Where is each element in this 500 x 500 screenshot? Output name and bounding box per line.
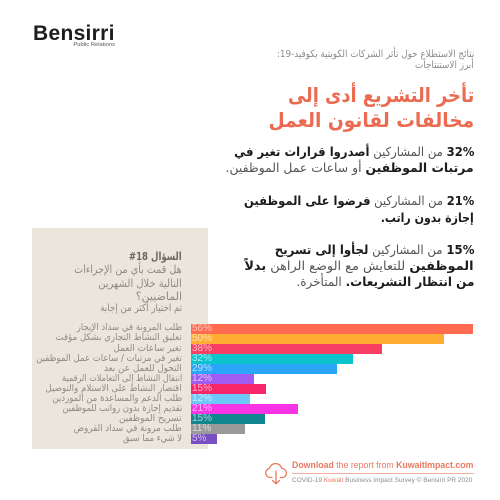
text block: 15% bbox=[244, 242, 474, 290]
question text: تم اختيار أكثر من إجابة bbox=[100, 303, 182, 314]
subtitle: أبرز الاستنتاجات bbox=[415, 60, 474, 71]
title: تأخر التشريع أدى إلى bbox=[288, 83, 474, 107]
chart labels: تغير في مرتبات / ساعات عمل الموظفين bbox=[36, 353, 182, 364]
logo: Bensirri bbox=[33, 22, 115, 45]
bar chart: 21% bbox=[192, 403, 212, 414]
text block: 15%: الموظفين للتعايش مع الوضع الراهن بدلاً bbox=[245, 258, 474, 273]
text block: 21%: 21% من المشاركين فرضوا على الموظفين bbox=[244, 193, 474, 208]
chart labels bbox=[36, 322, 182, 444]
title bbox=[268, 82, 474, 132]
chart labels: تسريح الموظفين bbox=[119, 413, 182, 424]
bar chart: 15% bbox=[192, 413, 212, 424]
question text: هل قمت بأي من الإجراءات bbox=[74, 263, 182, 276]
bar chart: 12% bbox=[192, 373, 212, 384]
chart labels: انتقال النشاط إلى التعاملات الرقمية bbox=[62, 373, 182, 384]
bar chart: 11% bbox=[192, 423, 211, 434]
bar chart: 38% bbox=[192, 343, 212, 354]
bar chart: 50% bbox=[192, 333, 212, 344]
panel: survey question bbox=[32, 228, 208, 449]
chart labels: طلب مرونة في سداد القروض bbox=[74, 423, 182, 434]
bar chart bbox=[191, 323, 473, 444]
divider bbox=[292, 473, 474, 474]
question text bbox=[74, 250, 182, 314]
chart labels: لا شيء مما سبق bbox=[123, 433, 182, 444]
text block: 32%: 32% من المشاركين أصدروا قرارات تغير في bbox=[234, 144, 474, 159]
chart labels: طلب الدعم والمساعدة من الموردين bbox=[52, 393, 182, 404]
logo: Public Relations bbox=[73, 42, 115, 48]
text block: 21% bbox=[244, 193, 474, 225]
footer credit: COVID-19 Kuwait Business Impact Survey © Bensirri PR 2020 bbox=[292, 477, 472, 484]
question text: الماضيين؟ bbox=[136, 290, 182, 303]
text block: 21%: إجازة بدون راتب. bbox=[381, 210, 474, 225]
question text: التالية خلال الشهرين bbox=[98, 277, 182, 290]
chart labels: تغير ساعات العمل bbox=[114, 343, 182, 354]
subtitle: نتائج الاستطلاع حول تأثر الشركات الكويتية بكوفيد-19: bbox=[277, 49, 474, 60]
chart labels: التحول للعمل عن بعد bbox=[104, 363, 182, 374]
question text: السؤال 18# bbox=[129, 250, 182, 263]
icon: cloud download bbox=[265, 462, 288, 484]
bar chart: 15% bbox=[192, 383, 212, 394]
bar chart: 12% bbox=[192, 393, 212, 404]
chart labels: تقديم إجازة بدون رواتب للموظفين bbox=[62, 403, 182, 414]
text block: 15%: من انتظار التشريعات. المتأخرة. bbox=[296, 274, 474, 289]
text block: 32%: مرتبات الموظفين أو ساعات عمل الموظفين. bbox=[226, 160, 474, 175]
bar chart: 32% bbox=[192, 353, 212, 364]
bar chart: 5% bbox=[192, 433, 206, 444]
download link: Download the report from KuwaitImpact.com bbox=[292, 460, 473, 470]
chart labels: طلب المرونة في سداد الإيجار bbox=[76, 322, 182, 333]
bar chart: 29% bbox=[192, 363, 212, 374]
title: مخالفات لقانون العمل bbox=[268, 108, 474, 132]
text block: 15%: 15% من المشاركين لجأوا إلى تسريح bbox=[274, 242, 474, 257]
chart labels: تعليق النشاط التجاري بشكل مؤقت bbox=[56, 332, 182, 343]
chart labels: اقتصار النشاط على الاستلام والتوصيل bbox=[46, 383, 182, 394]
text block: 32% bbox=[226, 144, 474, 176]
bar chart: 56% bbox=[192, 323, 212, 334]
subtitle bbox=[277, 46, 474, 71]
